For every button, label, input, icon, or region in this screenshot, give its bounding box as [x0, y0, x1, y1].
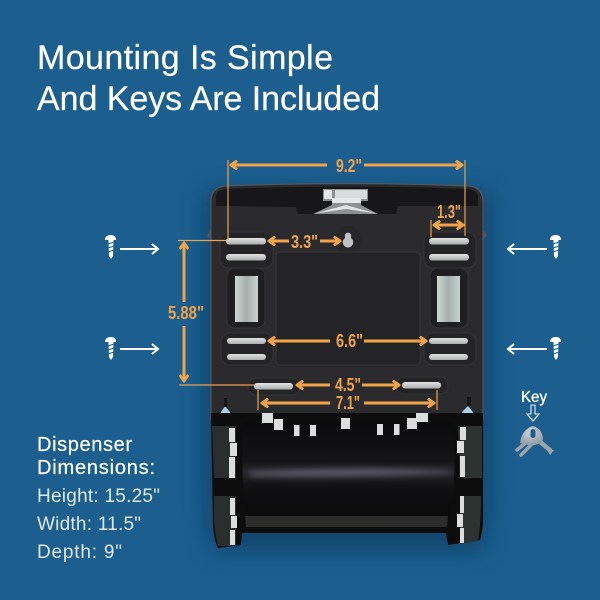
dimensions heading: Dimensions:: [37, 457, 155, 479]
dispenser: [207, 184, 487, 548]
dimensions values: Depth: 9": [37, 542, 122, 563]
mounting pads: [220, 232, 476, 395]
dispenser upper body: [211, 184, 483, 420]
measurement: 1.3 in: [431, 202, 463, 237]
icon: key: [517, 426, 554, 455]
measurement: 7.1 in: [258, 390, 437, 413]
title: And Keys Are Included: [37, 80, 380, 118]
dimensions heading: [37, 434, 155, 479]
key label: Key: [521, 389, 547, 406]
mounting slots: [226, 238, 469, 390]
left window: [227, 268, 265, 328]
right window: [430, 268, 468, 328]
measurement: 1.3 in: 1.3": [437, 202, 461, 222]
left side cavity: [212, 426, 236, 546]
measurement: 5.88 in: 5.88": [168, 303, 204, 323]
measurement: 9.2 in: [228, 156, 465, 240]
measurement: 6.6 in: 6.6": [336, 331, 363, 351]
icon: screw and arrow, top left: [105, 235, 158, 259]
center recessed panel: [276, 252, 420, 365]
dispenser shadow: [204, 190, 490, 552]
roller highlight: [250, 469, 450, 477]
top clip: [313, 189, 378, 214]
roller: [242, 422, 455, 516]
measurement: 7.1 in: 7.1": [336, 393, 360, 413]
measurement: 4.5 in: [297, 375, 399, 395]
icon: screw and arrow, top right: [508, 235, 561, 259]
blue clips: [221, 397, 473, 414]
dimensions values: Height: 15.25": [37, 486, 160, 507]
title: [37, 39, 380, 118]
top recess band: [216, 186, 478, 214]
dimensions heading: Dispenser: [37, 434, 132, 456]
lower housing: [211, 413, 483, 548]
right side cavity: [458, 426, 482, 544]
dimensions values: Width: 11.5": [37, 514, 141, 535]
icon: screw and arrow, bottom left: [105, 337, 158, 360]
keyhole: [334, 226, 362, 254]
icon: down arrow to key: [527, 405, 539, 421]
dispenser dimensions text: [37, 434, 160, 563]
dimensions values: [37, 486, 160, 563]
title: Mounting Is Simple: [37, 39, 333, 77]
icon: screw and arrow, bottom right: [508, 337, 561, 360]
paper tabs: [229, 413, 466, 545]
side tabs: [207, 229, 487, 239]
measurement: 3.3 in: 3.3": [291, 232, 318, 252]
measurement: 4.5 in: 4.5": [335, 375, 361, 395]
measurement: 9.2 in: 9.2": [336, 156, 362, 176]
tray: [245, 516, 448, 527]
